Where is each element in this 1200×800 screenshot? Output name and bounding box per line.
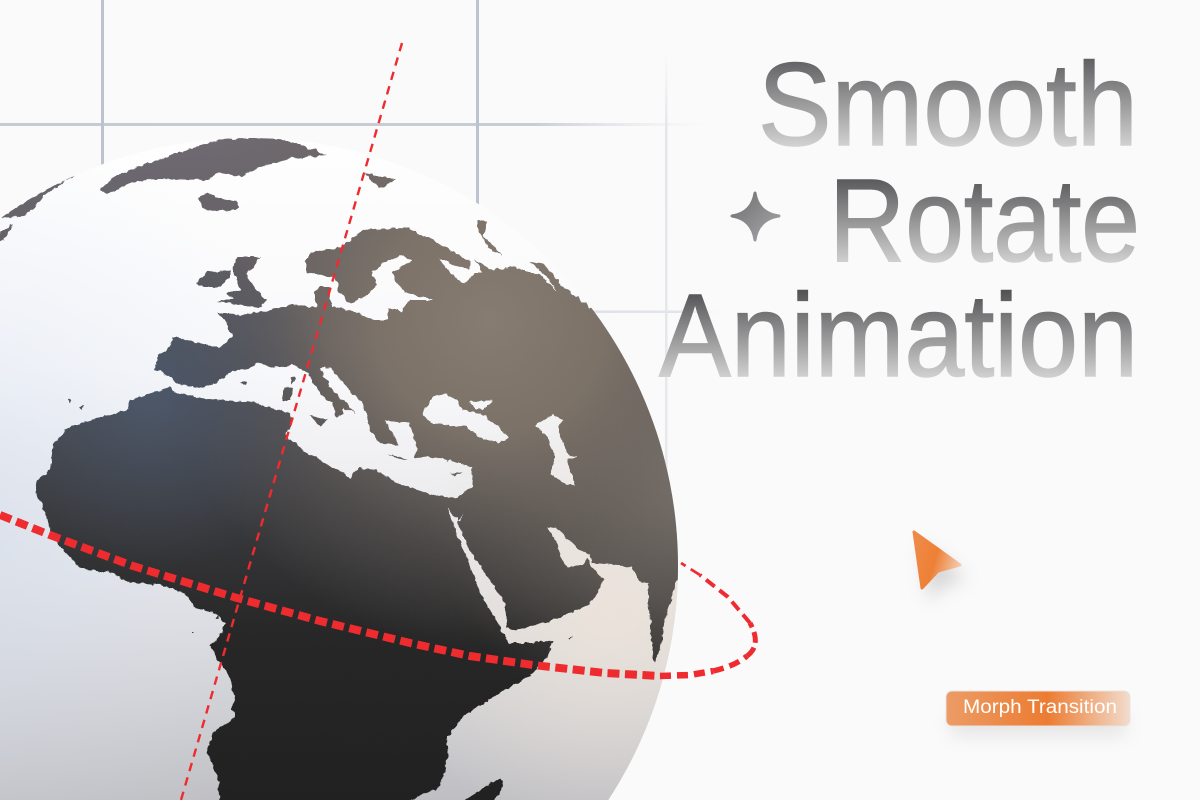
icon: orange cursor arrow — [914, 532, 966, 602]
badge: Morph Transition — [946, 691, 1130, 736]
title: Rotate: Rotate — [829, 155, 1140, 287]
ocean shading — [0, 130, 680, 800]
thin dashed meridian — [181, 43, 402, 800]
title: Animation: Animation — [659, 270, 1138, 402]
globe — [0, 130, 740, 800]
badge: Morph Transition: Morph Transition — [963, 697, 1117, 718]
icon: sparkle star — [732, 193, 779, 240]
dashed orbit ring — [0, 515, 755, 676]
continents — [0, 130, 740, 800]
title: Smooth: Smooth — [758, 39, 1138, 171]
grid lines — [0, 0, 720, 560]
